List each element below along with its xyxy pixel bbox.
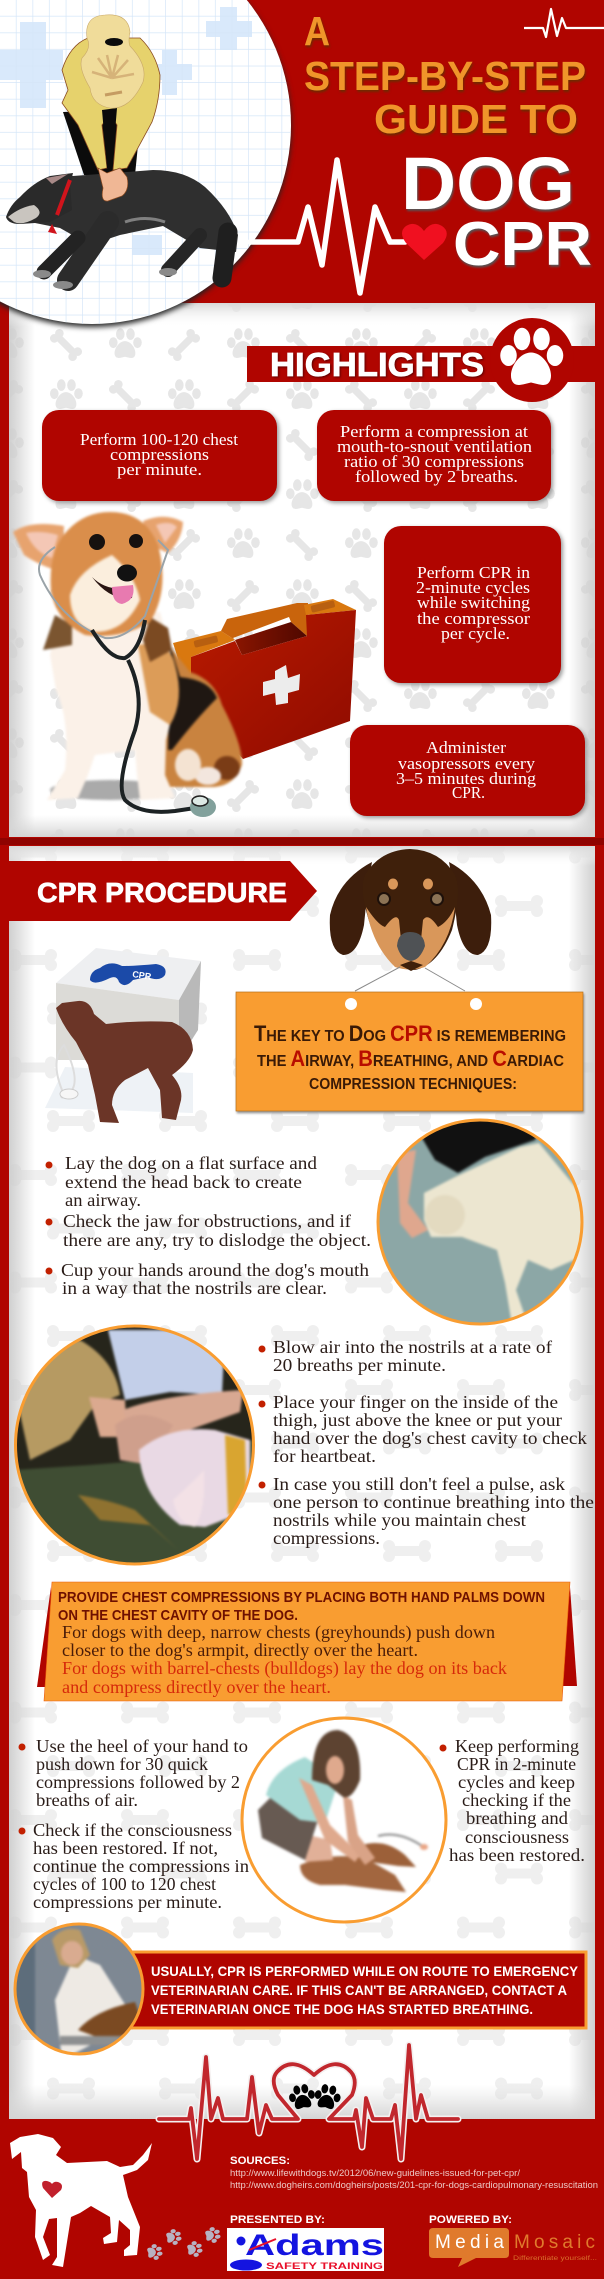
stethoscope <box>39 540 168 638</box>
bullet: keep performing cpr: cycles and keep <box>458 1772 575 1792</box>
illustration: corgi with stethoscope <box>13 512 242 817</box>
bullets: airway steps: extend the head back to create <box>65 1172 302 1192</box>
highlight card: ventilation ratio: ratio of 30 compressions <box>344 452 524 471</box>
bullets: breathing steps: one person to continue breathing into the <box>273 1492 594 1512</box>
bullets: breathing steps: compressions. <box>273 1528 380 1548</box>
powered by: media mosaic logo: POWERED BY: <box>429 2214 512 2226</box>
bullets: breathing steps: nostrils while you maintain chest <box>273 1510 526 1530</box>
bullets: compression steps: continue the compressions in <box>33 1856 249 1876</box>
icon: white dog silhouette <box>10 2134 152 2267</box>
illustration: first aid kit <box>173 599 356 759</box>
bullets: compression steps: push down for 30 quick <box>36 1754 208 1774</box>
bullets: compression steps: Use the heel of your hand to <box>36 1736 248 1756</box>
panel: cpr procedure <box>0 838 604 2119</box>
photo: hands around dog mouth <box>375 1115 590 1329</box>
bullet: keep performing cpr: consciousness <box>465 1827 569 1847</box>
sources: http://www.lifewithdogs.tv/2012/06/new-guidelines-issued-for-pet-cpr/ <box>230 2168 520 2179</box>
title: CPR <box>453 210 592 279</box>
bullets: compression steps: breaths of air. <box>36 1790 138 1810</box>
highlight card: vasopressors: vasopressors every <box>398 754 536 773</box>
highlight card: ventilation ratio: mouth-to-snout ventilation <box>337 437 533 456</box>
bullets: breathing steps <box>258 1337 594 1548</box>
bullets: airway steps: Lay the dog on a flat surface and <box>65 1153 317 1173</box>
hands <box>98 168 128 201</box>
body and legs <box>47 612 175 800</box>
highlight card: two-minute cycles: Perform CPR in <box>417 563 531 582</box>
heartbeat line <box>250 160 405 293</box>
highlight card: two-minute cycles <box>384 526 561 683</box>
callout: key to dog cpr <box>236 992 583 1111</box>
bullets: breathing steps: Place your finger on the inside of the <box>273 1392 558 1412</box>
photo: veterinarian <box>13 1923 145 2060</box>
sources: http://www.dogheirs.com/dogheirs/posts/201-cpr-for-dogs-cardiopulmonary-resuscitation <box>230 2180 598 2191</box>
bullets: airway steps: in a way that the nostrils are clear. <box>62 1278 327 1298</box>
callout: key to dog cpr: THE KEY TO DOG CPR IS REMEMBERING <box>254 1021 566 1046</box>
callout: chest compressions sign <box>37 1582 577 1701</box>
callout: chest compressions sign: and compress directly over the heart. <box>62 1677 331 1697</box>
powered by: media mosaic logo: Differentiate yourself... <box>513 2255 597 2262</box>
highlight card: two-minute cycles: per cycle. <box>441 624 510 643</box>
presented by: adams logo: SAFETY TRAINING <box>266 2261 383 2271</box>
panel: highlights <box>9 303 595 837</box>
highlight card: vasopressors: 3–5 minutes during <box>396 769 537 788</box>
highlight card: ventilation ratio: followed by 2 breaths. <box>355 467 518 486</box>
callout: chest compressions sign: For dogs with deep, narrow chests (greyhounds) push down <box>62 1622 495 1643</box>
rescuer legs <box>63 110 138 175</box>
bullets: breathing steps: In case you still don't feel a pulse, ask <box>273 1474 565 1494</box>
dog <box>6 170 238 289</box>
bullets: airway steps: Check the jaw for obstructions, and if <box>63 1211 351 1231</box>
photo: mouth-to-snout breathing <box>14 1325 256 1567</box>
powered by: media mosaic logo <box>429 2214 597 2267</box>
rescuer jacket <box>62 38 160 170</box>
rescuer hair <box>81 15 144 108</box>
photo: woman doing compressions <box>242 1718 446 1922</box>
bullet: keep performing cpr: CPR in 2-minute <box>457 1754 576 1774</box>
bullet: keep performing cpr: breathing and <box>466 1808 568 1828</box>
hero circle with rescuer and dog illustration <box>0 0 310 340</box>
callout: key to dog cpr: COMPRESSION TECHNIQUES: <box>309 1076 517 1093</box>
sources: SOURCES: <box>230 2155 290 2167</box>
ears <box>13 524 64 572</box>
bullets: breathing steps: thigh, just above the knee or put your <box>273 1410 562 1430</box>
presented by: adams logo <box>227 2214 384 2271</box>
illustration: cpr training manikin <box>45 948 201 1123</box>
bullets: compression steps: Check if the consciousness <box>33 1820 232 1840</box>
highlight card: two-minute cycles: while switching <box>417 593 531 612</box>
haunch <box>150 640 242 787</box>
title: DOG <box>401 142 575 225</box>
bullets: compression steps: cycles of 100 to 120 chest <box>33 1874 216 1894</box>
highlight card: compressions per minute: per minute. <box>117 460 202 479</box>
bullets: breathing steps: hand over the dog's chest cavity to check <box>273 1428 587 1448</box>
bullet: keep performing cpr <box>440 1736 585 1865</box>
callout: emergency vet care <box>130 1952 586 2028</box>
callout: emergency vet care: USUALLY, CPR IS PERFORMED WHILE ON ROUTE TO EMERGENCY <box>151 1963 579 1979</box>
heading: cpr procedure banner <box>9 861 317 921</box>
highlight card: two-minute cycles: 2-minute cycles <box>416 578 530 597</box>
presented by: adams logo: PRESENTED BY: <box>230 2214 325 2226</box>
sources <box>230 2155 598 2191</box>
highlight card: two-minute cycles: the compressor <box>417 609 530 628</box>
illustration: cpr training manikin: CPR <box>132 969 152 982</box>
highlight card: vasopressors: CPR. <box>452 783 485 802</box>
callout: key to dog cpr: THE AIRWAY, BREATHING, AND CARDIAC <box>257 1046 564 1071</box>
bullets: airway steps <box>46 1153 371 1298</box>
highlight card: vasopressors: Administer <box>426 738 506 757</box>
bullet: keep performing cpr: checking if the <box>462 1790 571 1810</box>
bullets: compression steps: compressions per minute. <box>33 1892 222 1912</box>
bullets: breathing steps: 20 breaths per minute. <box>273 1355 446 1375</box>
heading: cpr procedure banner: CPR PROCEDURE <box>37 877 287 908</box>
title <box>304 8 592 279</box>
callout: chest compressions sign: ON THE CHEST CAVITY OF THE DOG. <box>58 1607 298 1624</box>
highlight card: compressions per minute: Perform 100-120 chest <box>80 430 238 449</box>
highlight card: compressions per minute <box>42 410 277 501</box>
title: STEP-BY-STEP <box>304 53 586 99</box>
bullets: airway steps: there are any, try to dislodge the object. <box>63 1230 371 1250</box>
bullets: breathing steps: for heartbeat. <box>273 1446 376 1466</box>
icon: paw <box>500 328 563 385</box>
icon: heart <box>402 224 447 260</box>
bullet: keep performing cpr: Keep performing <box>455 1736 579 1756</box>
bullets: compression steps: compressions followed by 2 <box>36 1772 240 1792</box>
callout: chest compressions sign: For dogs with barrel-chests (bulldogs) lay the dog on its back <box>62 1658 507 1679</box>
callout: emergency vet care: VETERINARIAN CARE. IF THIS CAN'T BE ARRANGED, CONTACT A <box>151 1982 567 1998</box>
callout: chest compressions sign: closer to the dog's armpit, directly over the heart. <box>62 1640 418 1660</box>
collar <box>57 180 70 215</box>
bullets: airway steps: an airway. <box>65 1190 141 1210</box>
heading: highlights banner <box>247 318 595 402</box>
footer heartbeat line with paw heart <box>159 2045 458 2159</box>
small heartbeat line <box>524 9 604 37</box>
icon: paws <box>287 2083 342 2110</box>
illustration: dog head <box>330 849 491 971</box>
bullets: compression steps <box>18 1736 249 1912</box>
heading: highlights banner: HIGHLIGHTS <box>270 346 484 383</box>
callout: chest compressions sign: PROVIDE CHEST COMPRESSIONS BY PLACING BOTH HAND PALMS DOWN <box>58 1589 545 1606</box>
powered by: media mosaic logo: Media <box>435 2232 504 2253</box>
highlight card: ventilation ratio <box>317 410 551 501</box>
bullets: compression steps: has been restored. If not, <box>33 1838 218 1858</box>
bullets: airway steps: Cup your hands around the dog's mouth <box>61 1260 369 1280</box>
callout: emergency vet care: VETERINARIAN ONCE THE DOG HAS STARTED BREATHING. <box>151 2001 533 2017</box>
presented by: adams logo: Adams <box>245 2229 384 2262</box>
highlight card: compressions per minute: compressions <box>110 445 209 464</box>
highlight card: vasopressors <box>350 725 585 816</box>
powered by: media mosaic logo: Mosaic <box>514 2232 595 2253</box>
icon: small paw trail <box>146 2226 221 2261</box>
bullets: breathing steps: Blow air into the nostrils at a rate of <box>273 1337 552 1357</box>
head <box>51 512 162 636</box>
highlight card: ventilation ratio: Perform a compression at <box>340 422 528 441</box>
bullet: keep performing cpr: has been restored. <box>449 1845 585 1865</box>
title: GUIDE TO <box>374 96 578 142</box>
sign strings <box>355 967 465 991</box>
title: A <box>304 8 330 54</box>
